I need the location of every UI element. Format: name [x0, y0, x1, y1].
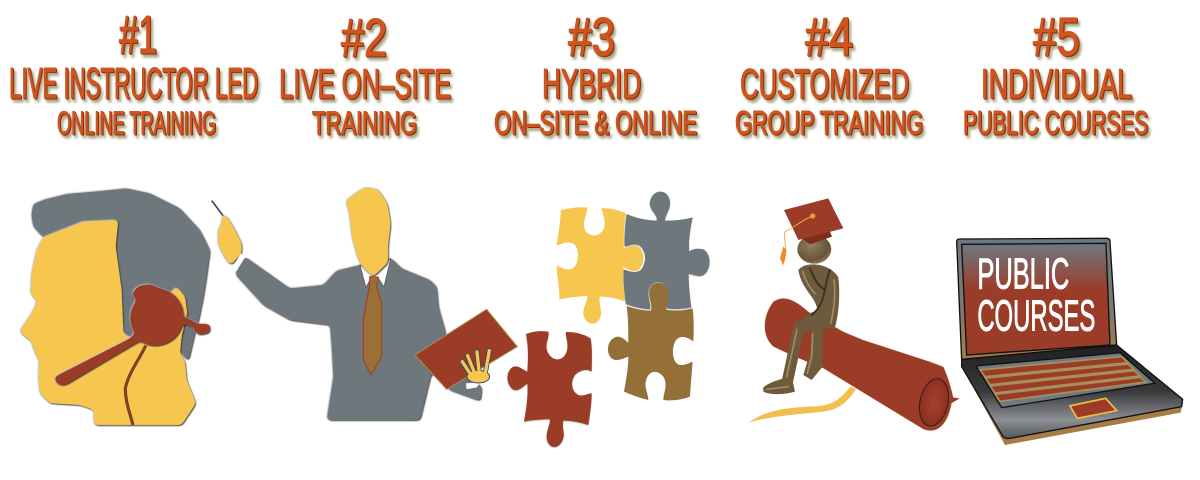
- heading: #2 live on-site training: [279, 8, 451, 141]
- laptop touchpad: [1070, 398, 1117, 418]
- puzzle piece: red: [507, 331, 592, 447]
- icon: presenter in suit with pointer and folder: [212, 187, 517, 420]
- heading: #1 live instructor led online training: LIVE INSTRUCTOR LED: [9, 59, 258, 108]
- presenter hand on folder: [462, 351, 490, 383]
- heading: #3 hybrid on-site and online: ON–SITE & ONLINE: [494, 104, 697, 141]
- heading: #1 live instructor led online training: ONLINE TRAINING: [57, 105, 216, 141]
- laptop screen text: COURSES: [977, 293, 1095, 341]
- laptop screen text: PUBLIC: [977, 250, 1069, 298]
- headset cord: [125, 346, 146, 425]
- heading: #2 live on-site training: LIVE ON–SITE: [279, 60, 451, 107]
- heading: #4 customized group training: CUSTOMIZED: [740, 60, 909, 107]
- heading: #1 live instructor led online training: [9, 5, 258, 141]
- heading: #5 individual public courses: [963, 7, 1148, 141]
- heading: #3 hybrid on-site and online: #3: [568, 7, 615, 67]
- heading: #4 customized group training: #4: [805, 7, 853, 67]
- icon: four puzzle pieces: [507, 192, 710, 447]
- laptop base: [962, 367, 1183, 445]
- laptop lid: [957, 238, 1117, 360]
- heading: #5 individual public courses: #5: [1033, 7, 1080, 67]
- icon: graduate figure sitting on diploma scroll: [749, 198, 960, 431]
- heading: #4 customized group training: GROUP TRAINING: [735, 104, 923, 141]
- heading: #2 live on-site training: TRAINING: [312, 105, 417, 141]
- heading: #4 customized group training: [735, 7, 923, 141]
- heading: #3 hybrid on-site and online: [494, 7, 697, 141]
- puzzle piece: yellow: [557, 207, 643, 324]
- headset boom and earpiece: [55, 284, 210, 385]
- heading: #1 live instructor led online training: #1: [119, 5, 157, 65]
- laptop keyboard: [976, 353, 1155, 408]
- graduate figure: [763, 235, 839, 394]
- laptop screen text: [977, 250, 1095, 341]
- heading: #3 hybrid on-site and online: HYBRID: [542, 60, 641, 107]
- icon: laptop showing public courses: [957, 238, 1183, 445]
- puzzle piece: brown: [608, 283, 694, 400]
- puzzle piece: gray: [623, 192, 710, 309]
- icon: head with headset: [19, 188, 210, 425]
- heading: #2 live on-site training: #2: [341, 8, 387, 68]
- graduation cap and tassel: [780, 198, 843, 265]
